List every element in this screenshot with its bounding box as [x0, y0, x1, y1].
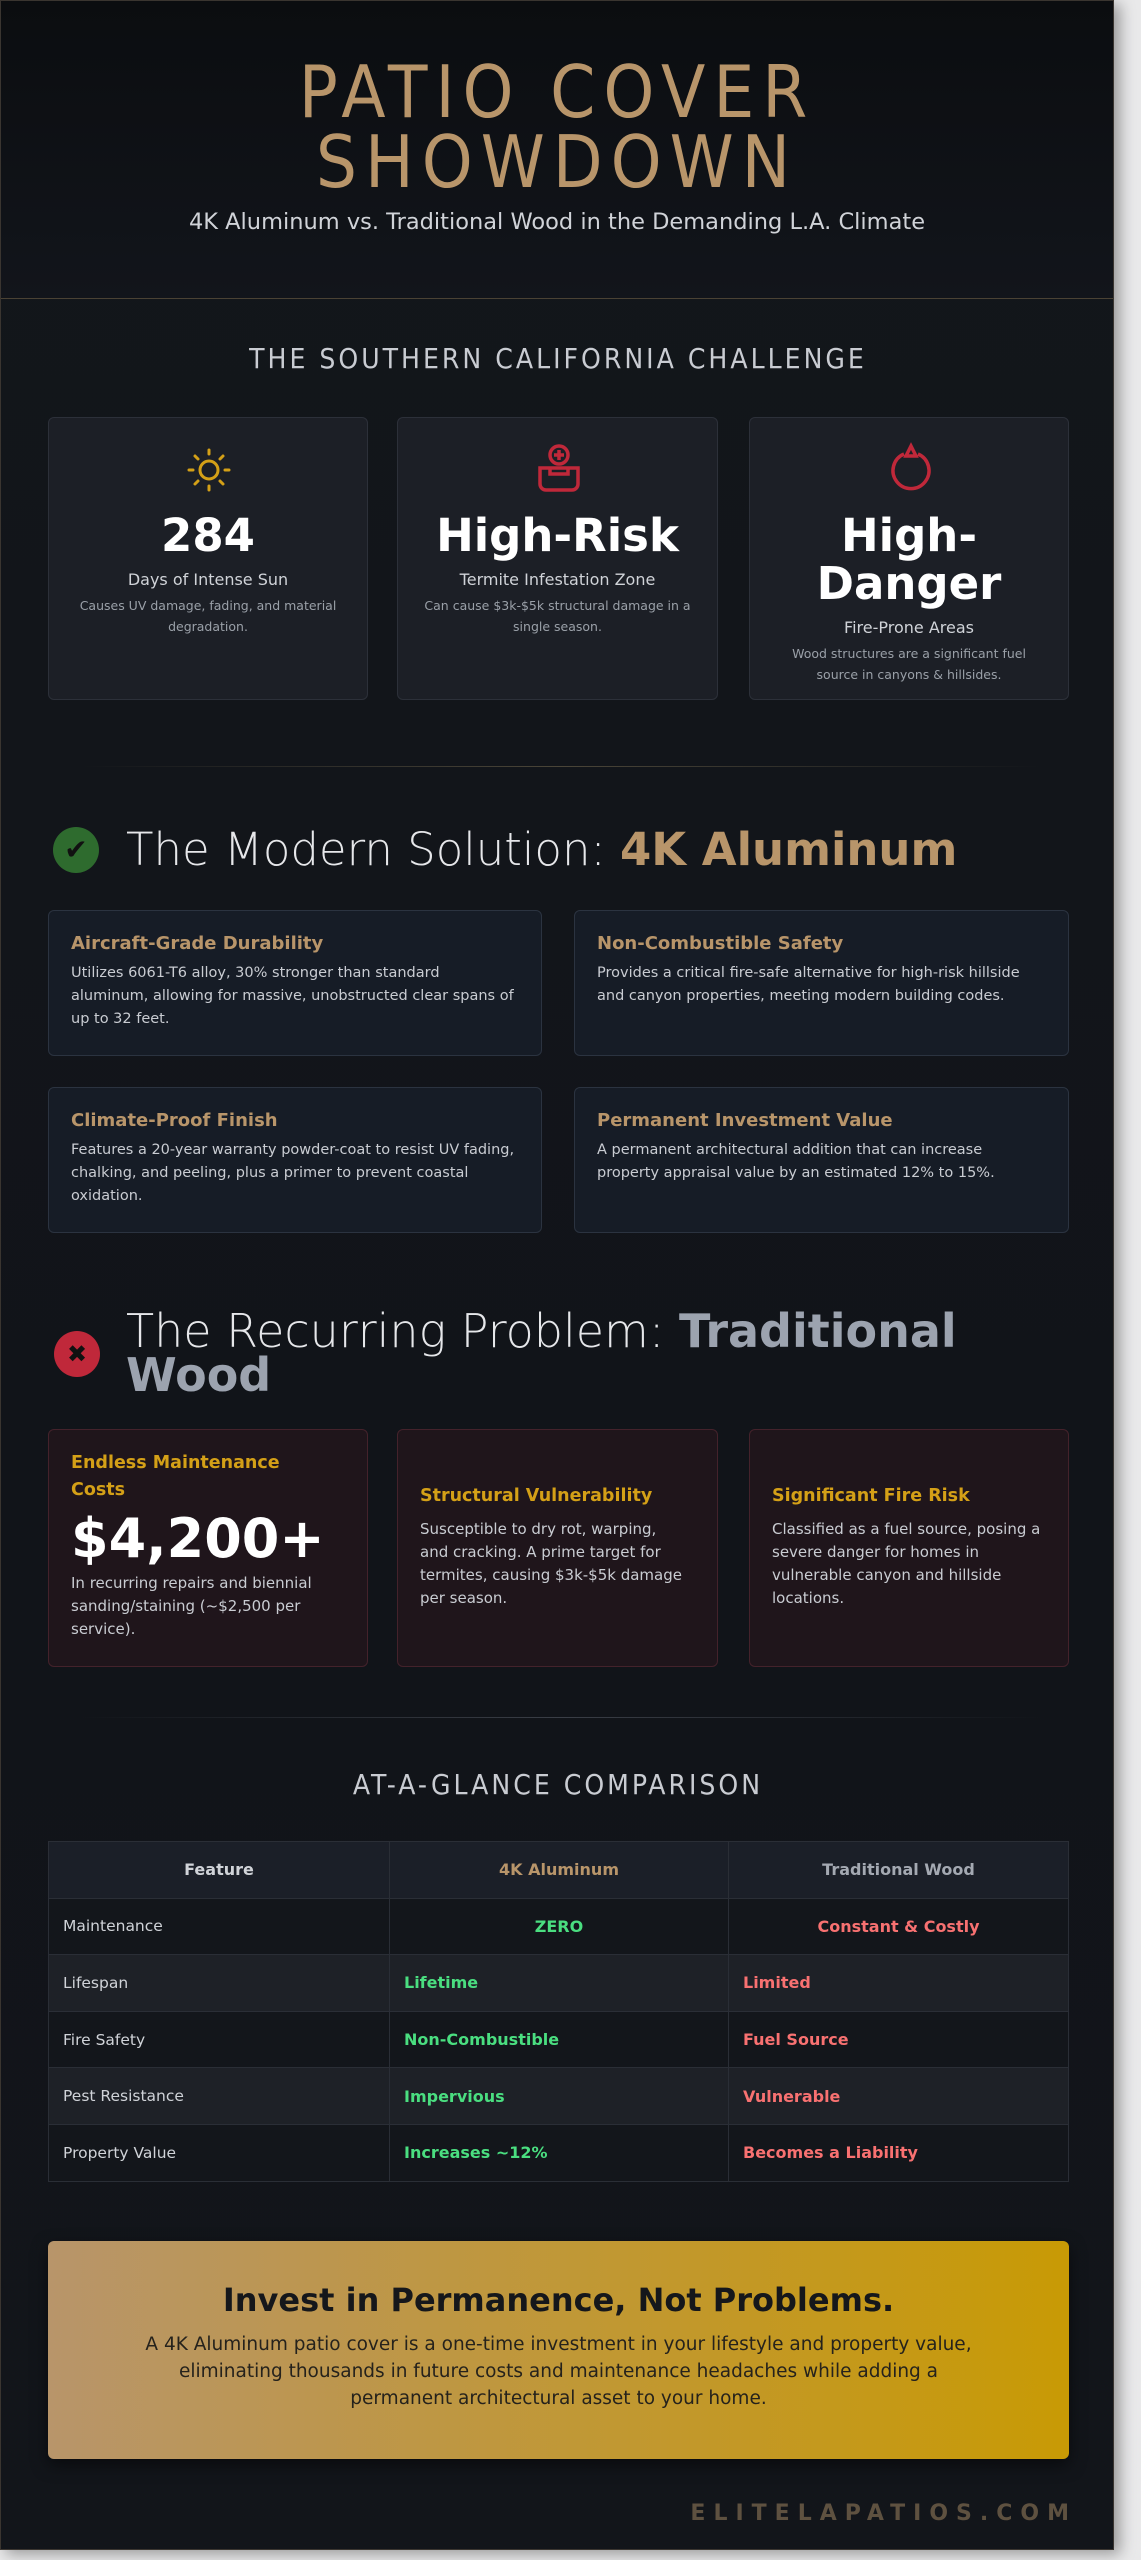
- icon: check: [53, 827, 99, 873]
- wood card: structural: [397, 1429, 718, 1667]
- feature: safety: Non-Combustible Safety: [597, 933, 843, 954]
- card: termite: Can cause $3k-$5k structural damage in a single season.: [424, 598, 691, 634]
- feature: durability: Aircraft-Grade Durability: [71, 933, 323, 954]
- card: termite: High-Risk: [436, 509, 679, 562]
- wood card: maintenance: Endless Maintenance Costs: [71, 1453, 280, 1500]
- wood card: maintenance: $4,200+: [71, 1507, 325, 1570]
- comparison table: Feature: [184, 1860, 254, 1879]
- card: sun: Causes UV damage, fading, and material degradation.: [80, 598, 336, 634]
- feature: investment: A permanent architectural addition that can increase property appraisal value by an estimated 12% to 15%.: [597, 1142, 995, 1181]
- comparison table: Pest Resistance: [63, 2087, 184, 2105]
- comparison table: Vulnerable: [743, 2087, 840, 2106]
- comparison table: Constant & Costly: [817, 1917, 980, 1936]
- call to action: Invest in Permanence, Not Problems.: [223, 2281, 894, 2319]
- title: [299, 50, 815, 204]
- heading: modern solution: The Modern Solution: 4K Aluminum: [126, 823, 957, 876]
- comparison table: Increases ~12%: [404, 2143, 548, 2162]
- title: PATIO COVER: [299, 50, 815, 134]
- wood card: structural: Structural Vulnerability: [420, 1486, 652, 1506]
- feature: investment: [574, 1087, 1069, 1233]
- comparison table: ZERO: [535, 1917, 583, 1936]
- card: sun: [48, 417, 368, 700]
- comparison table: [48, 1841, 1069, 2182]
- icon: sun: [188, 448, 230, 492]
- comparison table: Lifetime: [404, 1973, 478, 1992]
- comparison table: Fuel Source: [743, 2030, 849, 2049]
- feature: investment: Permanent Investment Value: [597, 1110, 893, 1131]
- comparison table: Lifespan: [63, 1974, 128, 1992]
- wood card: fire: [749, 1429, 1069, 1667]
- comparison table: Traditional Wood: [822, 1860, 975, 1879]
- feature: durability: [48, 910, 542, 1056]
- icon: termite: [538, 444, 580, 492]
- card: fire: Danger: [817, 557, 1001, 610]
- card: fire: High-: [841, 509, 977, 562]
- call to action: [48, 2241, 1069, 2459]
- header band: [1, 1, 1113, 299]
- heading: recurring problem: The Recurring Problem: Traditional Wood: [126, 1304, 957, 1402]
- footer brand: ELITELAPATIOS.COM: [690, 2501, 1077, 2526]
- icon: cross: [54, 1331, 100, 1377]
- icon: fire bomb: [891, 442, 931, 490]
- icon: cross: ✖: [67, 1340, 87, 1368]
- card: fire: [749, 417, 1069, 700]
- comparison table: Non-Combustible: [404, 2030, 559, 2049]
- call to action: A 4K Aluminum patio cover is a one-time investment in your lifestyle and property value, eliminating thousands in future costs and maintenance headaches while adding a permanent architectural asset to your home.: [145, 2334, 972, 2409]
- feature: durability: Utilizes 6061-T6 alloy, 30% stronger than standard aluminum, allowing for massive, unobstructed clear spans of up to 32 feet.: [71, 965, 514, 1027]
- feature: finish: [48, 1087, 542, 1233]
- comparison table: Becomes a Liability: [743, 2143, 918, 2162]
- feature: finish: Climate-Proof Finish: [71, 1110, 278, 1131]
- feature: finish: Features a 20-year warranty powder-coat to resist UV fading, chalking, and peeling, plus a primer to prevent coastal oxidation.: [71, 1142, 514, 1204]
- comparison table: Limited: [743, 1973, 811, 1992]
- comparison table: Maintenance: [63, 1917, 163, 1935]
- wood card: maintenance: In recurring repairs and biennial sanding/staining (~$2,500 per service).: [71, 1574, 312, 1638]
- section heading: comparison: AT-A-GLANCE COMPARISON: [353, 1768, 763, 1801]
- comparison table: Impervious: [404, 2087, 505, 2106]
- section heading: challenge: THE SOUTHERN CALIFORNIA CHALLENGE: [249, 342, 867, 375]
- card: sun: 284: [161, 509, 255, 562]
- comparison table: Property Value: [63, 2144, 176, 2162]
- comparison table: 4K Aluminum: [499, 1860, 619, 1879]
- wood card: fire: Classified as a fuel source, posing a severe danger for homes in vulnerable canyon and hillside locations.: [772, 1520, 1040, 1607]
- card: termite: [397, 417, 718, 700]
- wood card: fire: Significant Fire Risk: [772, 1486, 970, 1506]
- icon: check: ✔: [64, 833, 88, 866]
- title: SHOWDOWN: [316, 120, 798, 204]
- feature: safety: [574, 910, 1069, 1056]
- wood card: structural: Susceptible to dry rot, warping, and cracking. A prime target for termites, causing $3k-$5k damage per season.: [420, 1520, 682, 1607]
- card: fire: Wood structures are a significant fuel source in canyons & hillsides.: [792, 646, 1026, 682]
- comparison table: Fire Safety: [63, 2031, 145, 2049]
- card: termite: Termite Infestation Zone: [460, 570, 655, 589]
- wood card: maintenance: [48, 1429, 368, 1667]
- subtitle: 4K Aluminum vs. Traditional Wood in the Demanding L.A. Climate: [189, 209, 925, 235]
- feature: safety: Provides a critical fire-safe alternative for high-risk hillside and canyon properties, meeting modern building codes.: [597, 965, 1020, 1004]
- card: sun: Days of Intense Sun: [128, 570, 288, 589]
- card: fire: Fire-Prone Areas: [844, 618, 974, 637]
